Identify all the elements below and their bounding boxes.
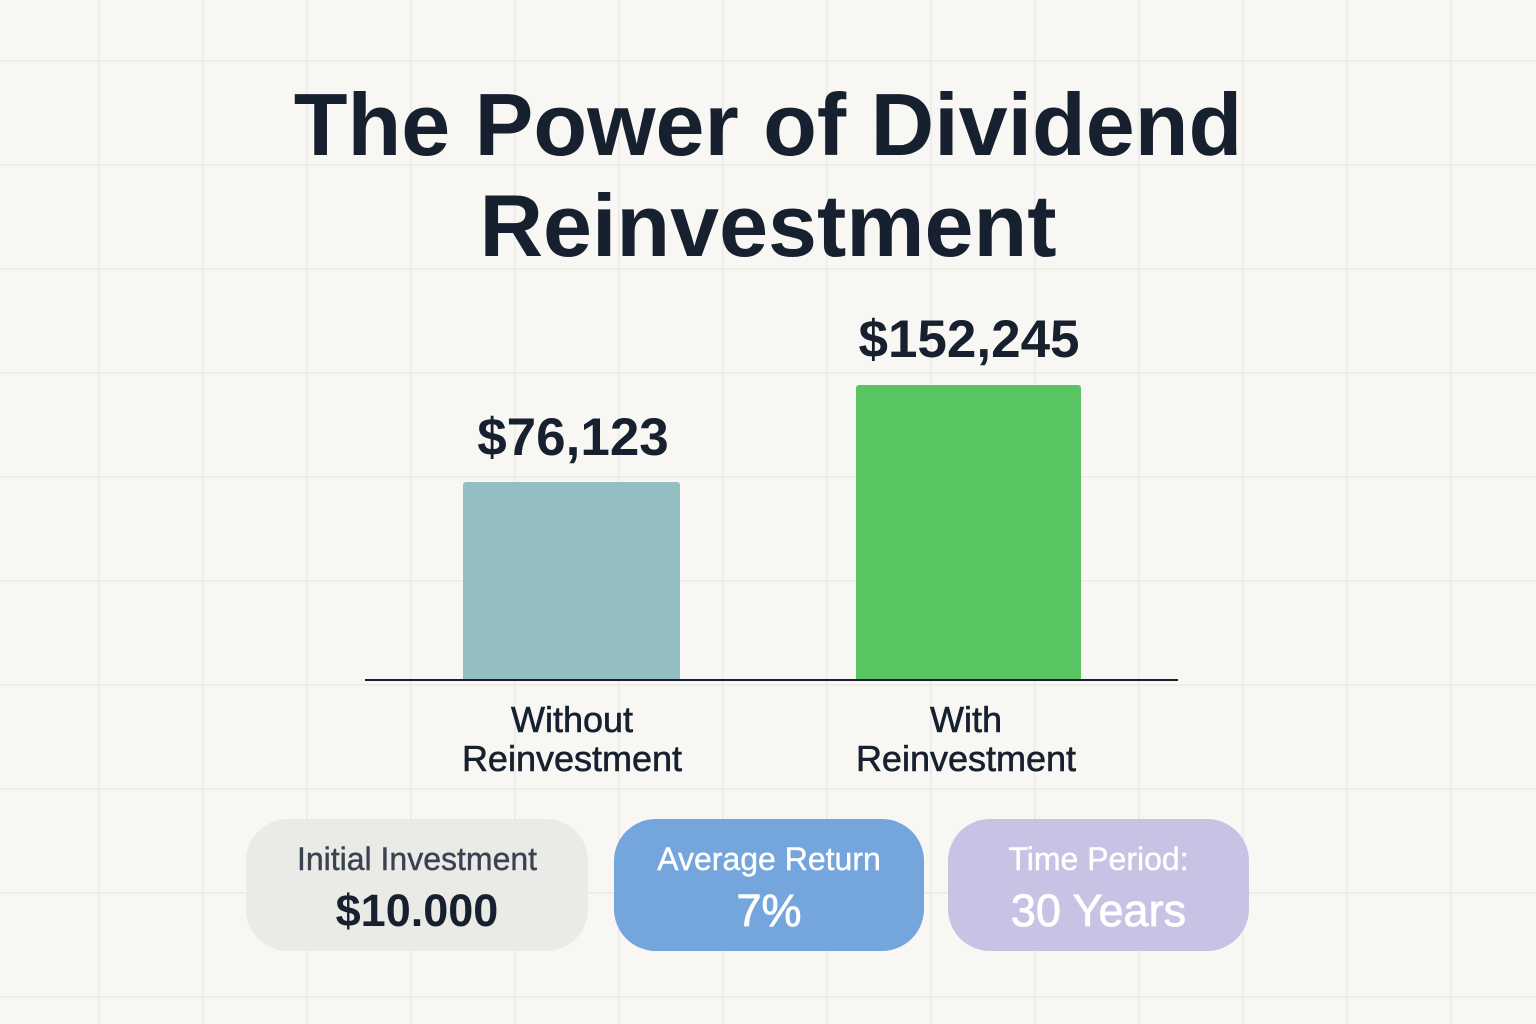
title: Reinvestment xyxy=(479,176,1057,275)
pill: average return: 7% xyxy=(736,885,802,936)
pill: initial investment xyxy=(246,819,588,951)
category label: with xyxy=(856,699,1076,779)
pill: time period: Time Period: xyxy=(1008,841,1189,877)
pill: average return xyxy=(614,819,924,951)
axis line xyxy=(365,679,1178,681)
pill: time period: 30 Years xyxy=(1011,885,1186,936)
title xyxy=(294,75,1242,275)
pill: average return: Average Return xyxy=(657,841,881,877)
category label: with: Reinvestment xyxy=(856,738,1076,779)
category label: with: With xyxy=(930,699,1002,740)
category label: without: Reinvestment xyxy=(462,738,682,779)
category label: without xyxy=(462,699,682,779)
pill: initial investment: Initial Investment xyxy=(297,841,537,877)
title: The Power of Dividend xyxy=(294,75,1242,174)
value label: with: $152,245 xyxy=(858,310,1080,369)
pill: time period xyxy=(948,819,1249,951)
pill: initial investment: $10.000 xyxy=(336,885,498,936)
value label: without: $76,123 xyxy=(477,408,669,467)
bar chart xyxy=(365,310,1178,779)
bar: without reinvestment xyxy=(463,482,680,680)
category label: without: Without xyxy=(511,699,633,740)
bar: with reinvestment xyxy=(856,385,1081,680)
